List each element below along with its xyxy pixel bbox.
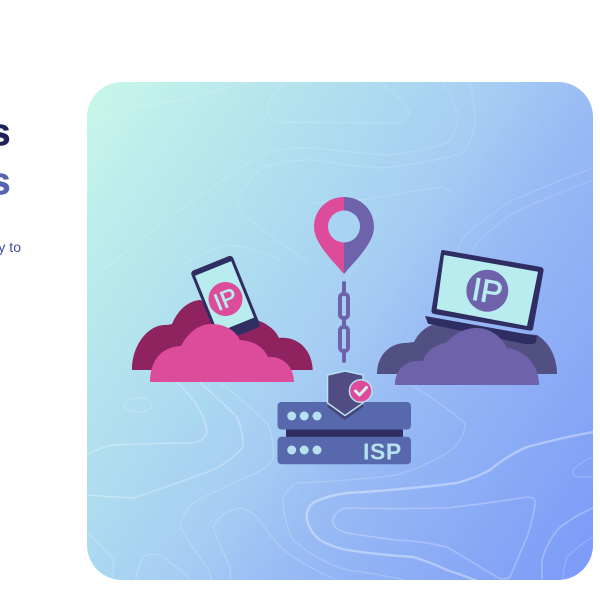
icon: security shield with check badge (328, 371, 372, 420)
icon: smartphone showing IP (190, 255, 261, 343)
back cloud: dark magenta (132, 300, 313, 370)
back cloud: dark purple (377, 325, 557, 374)
icon: smartphone showing IP: IP (210, 283, 241, 317)
icon: chain (340, 283, 348, 361)
server connector bar (286, 429, 403, 437)
front cloud: pink (150, 324, 294, 382)
front cloud: purple (395, 328, 539, 385)
server unit: top (278, 402, 411, 430)
cloud group: laptop on purple clouds (377, 250, 557, 385)
icon: location pin (314, 197, 374, 274)
server unit: bottom with ISP label: ISP (363, 438, 402, 464)
icon: laptop showing IP: IP (469, 271, 505, 311)
server: ISP rack (278, 402, 411, 464)
cloud group: phone on pink clouds (132, 255, 313, 382)
panel: illustration background (87, 82, 593, 582)
icon: laptop showing IP (425, 250, 544, 344)
